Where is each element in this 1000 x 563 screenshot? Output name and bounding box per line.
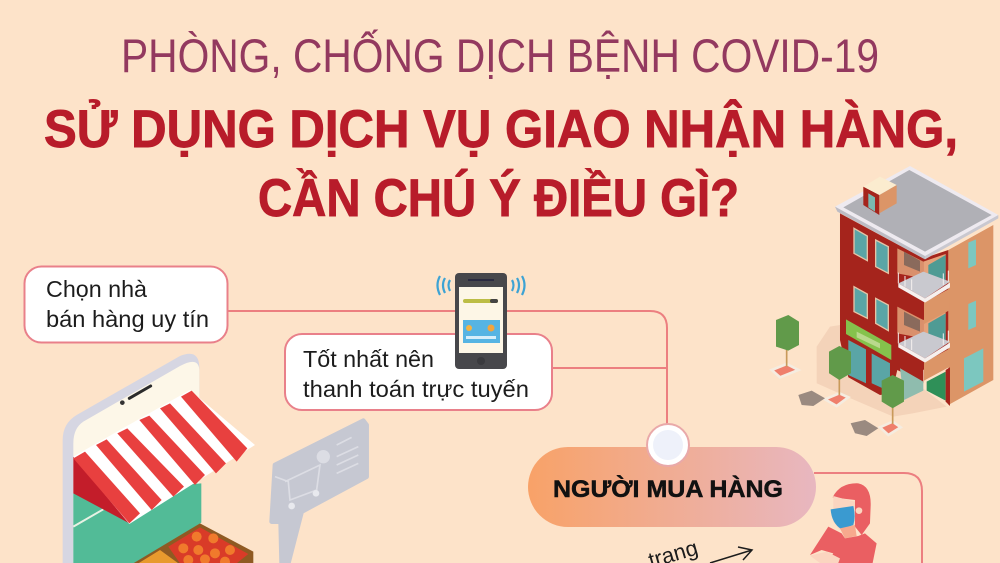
left wall [840, 213, 948, 395]
heading: main title: CẦN CHÚ Ý ĐIỀU GÌ? [258, 168, 739, 228]
lower balcony [898, 331, 950, 363]
awning white base [73, 390, 255, 524]
label: rotated text with arrow [645, 535, 752, 563]
illustration: phone shop [63, 354, 255, 563]
tree crowns [776, 315, 904, 408]
shop wall [73, 483, 201, 563]
crate of oranges [133, 523, 253, 563]
lower balcony recess [897, 307, 923, 338]
phone body [63, 354, 199, 563]
upper balcony recess [897, 248, 923, 278]
right wall [948, 225, 993, 405]
green shop sign [846, 319, 891, 360]
callout: online payment [285, 334, 552, 410]
illustration: apartment building [772, 166, 998, 436]
roof access box [863, 187, 879, 215]
awning red stripes [73, 391, 247, 523]
callout: choose reputable seller: Chọn nhà [46, 276, 147, 302]
connector lines [228, 311, 922, 563]
awning side [73, 457, 129, 523]
speaker [129, 386, 151, 398]
callout: choose reputable seller [24, 266, 228, 342]
tree shadows [798, 391, 878, 436]
icon: smartphone with card payment [438, 273, 524, 369]
node: buyer pill: NGƯỜI MUA HÀNG [553, 475, 783, 503]
node: buyer pill [528, 424, 816, 527]
callout: choose reputable seller: bán hàng uy tín [46, 306, 209, 332]
windows on right wall [964, 239, 983, 392]
icon: grey sign with shopping cart [272, 421, 367, 563]
windows on left wall [854, 228, 888, 331]
ground shadow [817, 325, 947, 417]
heading: main title [44, 98, 958, 228]
callout: online payment: Tốt nhất nên [303, 346, 434, 372]
tree trunks [787, 347, 893, 424]
tree planters [772, 364, 901, 435]
icon: wifi waves [438, 276, 524, 295]
storefront [848, 340, 866, 383]
callout: online payment: thanh toán trực tuyến [303, 376, 529, 402]
connector node circle [647, 424, 689, 466]
entrance [927, 372, 946, 401]
illustration: buyer wearing mask [810, 483, 877, 563]
roof [835, 166, 998, 258]
upper balcony [898, 271, 950, 303]
orange bands under balconies [924, 288, 950, 324]
heading: topic line: PHÒNG, CHỐNG DỊCH BỆNH COVID-19 [121, 29, 879, 82]
